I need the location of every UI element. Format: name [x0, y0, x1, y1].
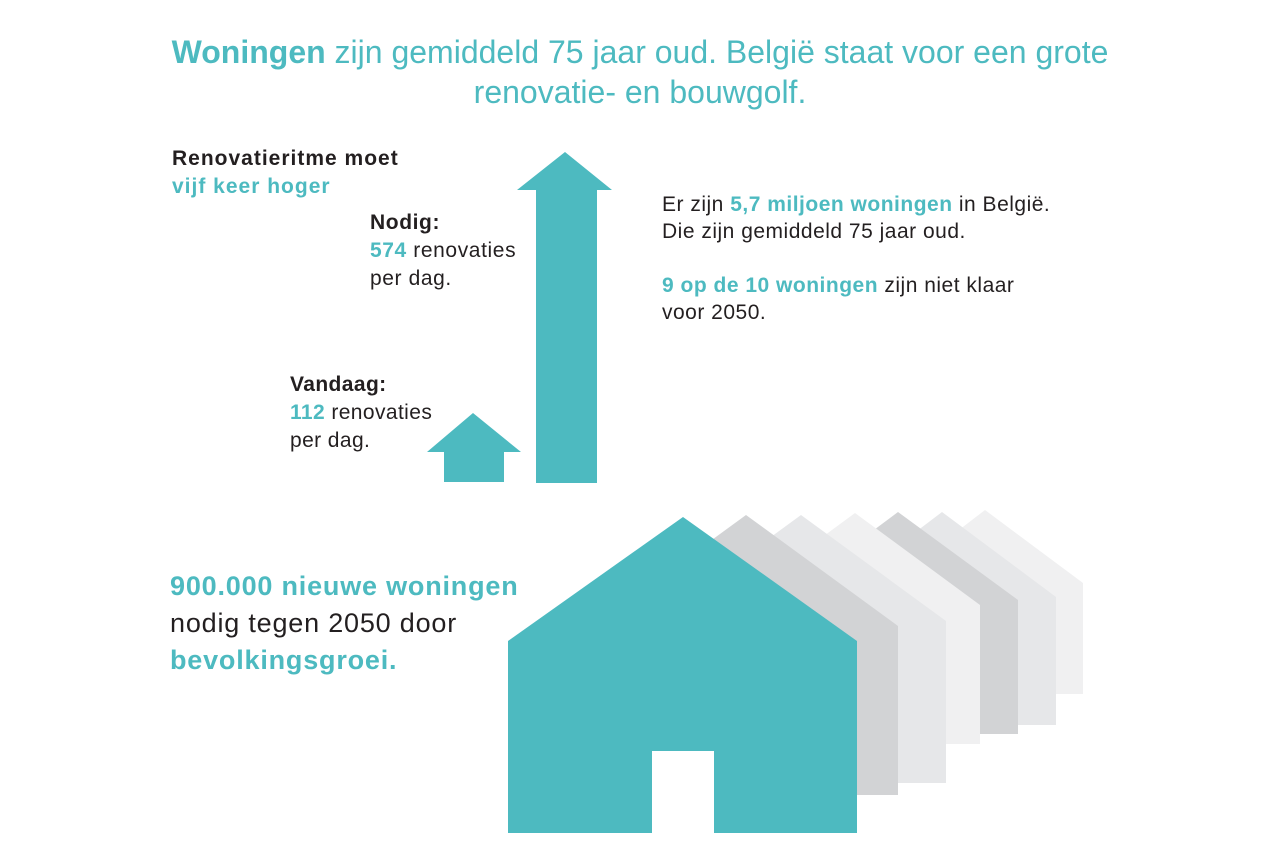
text: facts: Er zijn 5,7 miljoen woningen in België.: [662, 193, 1050, 216]
title: [172, 34, 1108, 110]
text: renovatieritme: vijf keer hoger: [172, 175, 331, 198]
text: nodig: per dag.: [370, 267, 452, 290]
text: renovatieritme: [172, 147, 399, 198]
text: nodig: 574 renovaties: [370, 239, 516, 262]
text: nieuwe woningen: nodig tegen 2050 door: [170, 608, 457, 638]
text: vandaag: Vandaag:: [290, 373, 387, 396]
text: facts: 9 op de 10 woningen zijn niet klaar: [662, 274, 1014, 297]
icon: small arrow: [427, 413, 521, 482]
text: facts: [662, 193, 1050, 324]
icon: main teal house: [508, 517, 857, 835]
text: nieuwe woningen: [170, 571, 519, 675]
icon: big arrow: [517, 152, 612, 483]
text: nodig: Nodig:: [370, 211, 440, 234]
title: Woningen zijn gemiddeld 75 jaar oud. België staat voor een grote: [172, 34, 1108, 70]
text: nodig: [370, 211, 516, 290]
text: vandaag: 112 renovaties: [290, 401, 432, 424]
title: renovatie- en bouwgolf.: [474, 74, 806, 110]
text: nieuwe woningen: bevolkingsgroei.: [170, 645, 397, 675]
text: facts: Die zijn gemiddeld 75 jaar oud.: [662, 220, 966, 243]
text: vandaag: per dag.: [290, 429, 370, 452]
text: facts: voor 2050.: [662, 301, 766, 324]
text: renovatieritme: Renovatieritme moet: [172, 147, 399, 170]
text: nieuwe woningen: 900.000 nieuwe woningen: [170, 571, 519, 601]
text: vandaag: [290, 373, 432, 452]
icon: grey houses row: [594, 510, 1083, 795]
